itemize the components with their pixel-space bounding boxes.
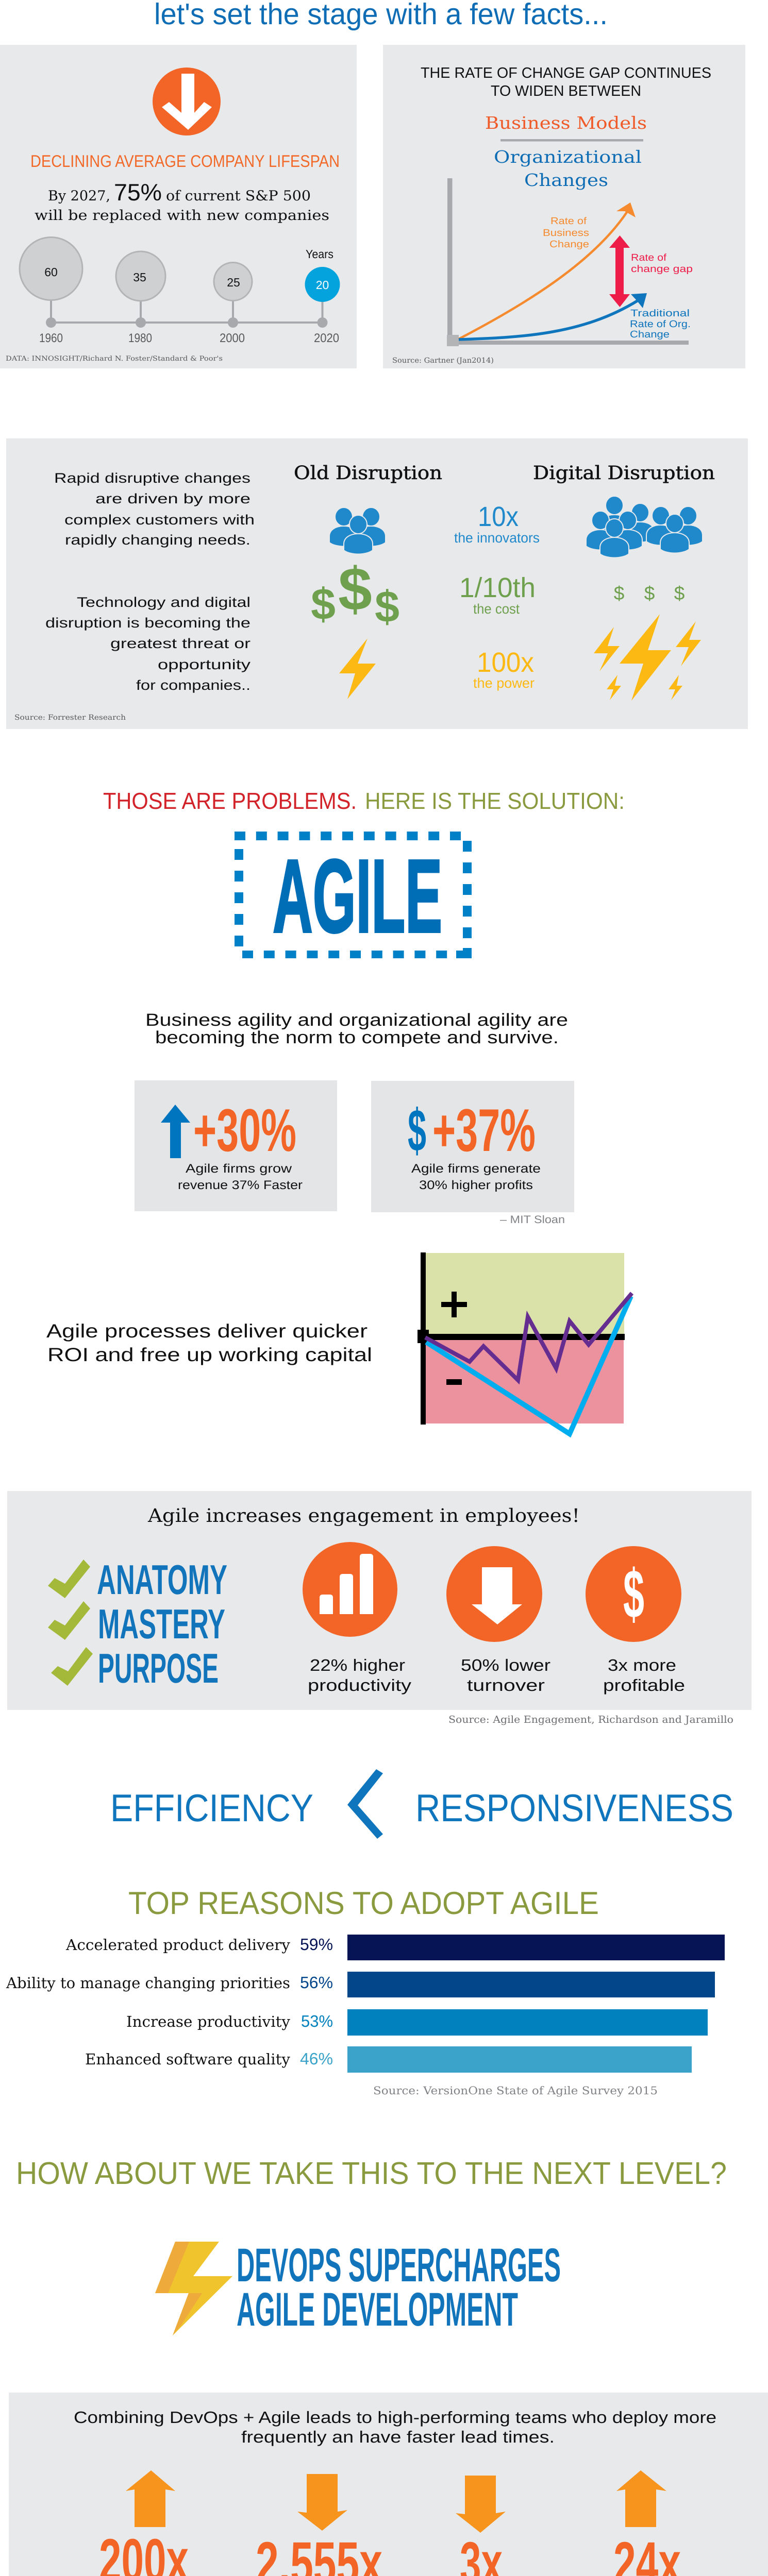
chart: rate of change curves (447, 178, 693, 346)
chart: lifespan timeline: 1980 (128, 331, 152, 345)
chart: rate of change curves: Change (630, 329, 670, 340)
comparison: efficiency less than responsiveness (110, 1769, 733, 1839)
checklist: anatomy mastery purpose: MASTERY (98, 1601, 225, 1648)
checklist: anatomy mastery purpose: ANATOMY (97, 1557, 227, 1603)
stat: one tenth the cost (459, 572, 536, 617)
fraction: business models over organizational changes: Changes (524, 170, 608, 190)
stat card: revenue: +30% (193, 1096, 296, 1164)
stat: 10x innovators: 10x (478, 501, 519, 532)
text block: 75 percent: By 2027, (48, 188, 110, 204)
stat card: profits: $ (408, 1097, 426, 1164)
comparison: efficiency less than responsiveness: RESPONSIVENESS (415, 1786, 733, 1829)
badge: agile in dashed box (235, 836, 472, 958)
chart: lifespan timeline: 20 (316, 278, 329, 292)
stat card: profits: +37% (432, 1096, 536, 1164)
panel: employee engagement (7, 1491, 752, 1710)
icon: down arrow in orange circle (153, 67, 221, 135)
chart: lifespan timeline: 2000 (220, 331, 245, 345)
text block: business agility (145, 1010, 568, 1047)
text block: combining devops and agile (74, 2408, 716, 2446)
stat: profitable: 3x more (608, 1656, 676, 1674)
panel: rate of change gap (383, 45, 745, 368)
stat: 10x innovators: the innovators (454, 530, 540, 546)
heading: engagement: Agile increases engagement in employees! (147, 1505, 580, 1527)
chart: rate of change curves: Business (543, 228, 589, 239)
icon: many lightning bolts (594, 614, 701, 701)
chart: lifespan timeline: 1960 (39, 331, 63, 345)
stat: productivity: productivity (308, 1676, 411, 1694)
stat: turnover: turnover (467, 1676, 545, 1694)
bar: enhanced software quality 46 percent: Enhanced software quality (85, 2050, 291, 2068)
text block: technology threat: for companies.. (136, 677, 251, 693)
heading: rate of change gap: TO WIDEN BETWEEN (491, 83, 641, 99)
checklist: anatomy mastery purpose (48, 1557, 227, 1692)
stat card: revenue: revenue 37% Faster (178, 1178, 303, 1192)
chart: lifespan timeline: Years (306, 247, 333, 261)
text block: 75 percent (35, 179, 329, 224)
stat card: profits: 30% higher profits (419, 1178, 533, 1192)
heading: devops supercharges agile (237, 2239, 561, 2336)
metric: 200x deployments (72, 2470, 207, 2576)
stat: 100x the power: the power (473, 675, 535, 691)
checklist: anatomy mastery purpose: PURPOSE (98, 1646, 219, 1692)
text block: rapid disruptive changes: are driven by more (95, 491, 251, 506)
metric: 24x recovery (570, 2470, 707, 2576)
icon: large group of people (586, 496, 703, 557)
source note: Source: Forrester Research (14, 714, 126, 722)
chart: lifespan timeline: 35 (133, 270, 146, 284)
stat: 10x innovators (454, 501, 540, 546)
bar: accelerated product delivery 59 percent (65, 1935, 725, 1960)
icon: small group of people (329, 507, 386, 554)
chart: rate of change curves: Rate of (631, 252, 667, 263)
text block: agile processes roi: ROI and free up working capital (47, 1344, 372, 1365)
text block: technology threat: disruption is becoming the (45, 615, 251, 631)
chart: rate of change curves: Rate of Org. (630, 319, 691, 330)
source note: Source: VersionOne State of Agile Survey 2015 (373, 2084, 658, 2097)
text block: technology threat: greatest threat or (110, 636, 251, 651)
text block: rapid disruptive changes (54, 470, 255, 548)
bar: manage changing priorities 56 percent: Ability to manage changing priorities (6, 1974, 290, 1992)
stat: profitable (586, 1546, 685, 1694)
text block: combining devops and agile: frequently an have faster lead times. (241, 2428, 555, 2446)
icon: small dollar signs: $ (614, 583, 624, 604)
icon: large dollar signs (311, 555, 399, 632)
fraction: business models over organizational changes: Business Models (485, 113, 647, 133)
fraction: business models over organizational changes: Organizational (494, 147, 642, 167)
stat: turnover (446, 1546, 550, 1694)
icon: large dollar signs: $ (311, 580, 336, 629)
stat card: profits: Agile firms generate (411, 1162, 541, 1176)
source note: – MIT Sloan (500, 1214, 565, 1226)
metric: 3x failure rate (426, 2476, 540, 2576)
bar chart: top reasons to adopt agile (6, 1935, 725, 2073)
text block: business agility: Business agility and organizational agility are (145, 1010, 568, 1030)
panel: old vs digital disruption (6, 438, 748, 729)
bar: increase productivity 53 percent: Increase productivity (126, 2013, 291, 2030)
comparison: efficiency less than responsiveness: EFFICIENCY (110, 1786, 313, 1829)
heading: problems and solution: HERE IS THE SOLUTION: (365, 788, 625, 814)
stat: productivity (303, 1542, 411, 1694)
text block: 75 percent: 75% (114, 179, 162, 206)
text block: agile processes roi (46, 1320, 372, 1365)
chart: lifespan timeline (20, 237, 340, 345)
icon: devops lightning bolt (155, 2242, 232, 2335)
bar: accelerated product delivery 59 percent: Accelerated product delivery (65, 1936, 291, 1954)
heading: rate of change gap (421, 65, 711, 99)
text block: technology threat: opportunity (158, 657, 251, 672)
heading: devops supercharges agile: AGILE DEVELOPMENT (237, 2283, 518, 2336)
icon: single lightning bolt (339, 638, 376, 699)
bar: increase productivity 53 percent (126, 2009, 708, 2036)
bar: increase productivity 53 percent: 53% (301, 2012, 333, 2030)
stat card: profits (371, 1081, 574, 1212)
chart: cash flow comparison (418, 1252, 632, 1434)
text block: rapid disruptive changes: rapidly changing needs. (65, 532, 251, 548)
panel: devops and agile metrics (9, 2393, 768, 2576)
text block: technology threat: Technology and digital (77, 595, 251, 610)
stat: 100x the power (473, 647, 535, 691)
fraction: business models over organizational changes (485, 113, 647, 190)
stat: one tenth the cost: 1/10th (459, 572, 536, 603)
chart: rate of change curves: change gap (631, 264, 693, 275)
source note: Source: Agile Engagement, Richardson and Jaramillo (448, 1714, 733, 1725)
metric: 2,555x lead times (256, 2474, 382, 2576)
bar: accelerated product delivery 59 percent: 59% (300, 1935, 333, 1954)
icon: large dollar signs: $ (338, 555, 372, 623)
text block: 75 percent: of current S&P 500 (166, 188, 311, 204)
stat: productivity: 22% higher (310, 1656, 405, 1674)
chart: lifespan timeline: 2020 (314, 331, 339, 345)
icon: small dollar signs: $ (644, 583, 655, 604)
icon: large dollar signs: $ (375, 582, 399, 632)
stat: profitable: $ (623, 1556, 644, 1633)
chart: lifespan timeline: 60 (44, 265, 58, 279)
text block: 75 percent: will be replaced with new companies (35, 208, 329, 224)
stat: profitable: profitable (603, 1676, 685, 1694)
heading: digital disruption: Digital Disruption (533, 463, 715, 484)
stat: turnover: 50% lower (461, 1656, 550, 1674)
panel: declining company lifespan (0, 45, 357, 368)
source note: DATA: INNOSIGHT/Richard N. Foster/Standard & Poor's (6, 355, 223, 363)
chart: rate of change curves: Traditional (630, 308, 690, 319)
chart: lifespan timeline: 25 (227, 276, 240, 289)
chart: rate of change curves: Change (549, 239, 589, 250)
source note: Source: Gartner (Jan2014) (392, 357, 494, 365)
heading: problems and solution: THOSE ARE PROBLEMS. (103, 788, 357, 814)
heading: old disruption: Old Disruption (294, 463, 442, 484)
text block: combining devops and agile: Combining DevOps + Agile leads to high-performing teams who deploy more (74, 2408, 716, 2427)
stat card: revenue: Agile firms grow (186, 1162, 292, 1176)
icon: small dollar signs (614, 583, 684, 604)
chart: rate of change curves: Rate of (550, 216, 587, 227)
icon: small dollar signs: $ (674, 583, 684, 604)
stat: 100x the power: 100x (477, 647, 534, 678)
text block: agile processes roi: Agile processes deliver quicker (46, 1320, 368, 1342)
stat: one tenth the cost: the cost (473, 601, 520, 617)
stat card: revenue (135, 1080, 337, 1211)
text block: business agility: becoming the norm to compete and survive. (155, 1028, 559, 1047)
heading: top reasons: TOP REASONS TO ADOPT AGILE (128, 1886, 599, 1921)
heading: next level: HOW ABOUT WE TAKE THIS TO THE NEXT LEVEL? (16, 2156, 727, 2191)
bar: manage changing priorities 56 percent: 56% (300, 1973, 333, 1992)
badge: agile in dashed box: AGILE (273, 838, 442, 954)
heading: rate of change gap: THE RATE OF CHANGE GAP CONTINUES (421, 65, 711, 81)
text block: rapid disruptive changes: complex customers with (64, 512, 255, 528)
bar: enhanced software quality 46 percent: 46% (300, 2049, 333, 2068)
bar: enhanced software quality 46 percent (85, 2046, 692, 2073)
bar: manage changing priorities 56 percent (6, 1972, 715, 1997)
text block: technology threat (45, 595, 251, 693)
heading: problems and solution (103, 788, 625, 814)
heading: declining lifespan: DECLINING AVERAGE COMPANY LIFESPAN (30, 151, 340, 171)
text block: rapid disruptive changes: Rapid disruptive changes (54, 470, 251, 486)
